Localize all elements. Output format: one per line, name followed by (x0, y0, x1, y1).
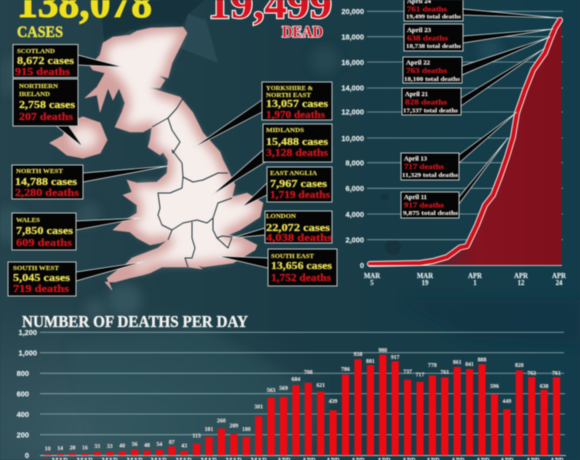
bar value labels: 786 (341, 367, 350, 373)
callout: Yorkshire and North East: 1,970 deaths (266, 109, 326, 121)
callout: South East: 13,656 cases (271, 260, 333, 272)
callout: South West: 719 deaths (13, 283, 70, 295)
callout: Midlands (212, 124, 332, 195)
gridlines and y axis labels: 400 (17, 410, 29, 419)
callout: Northern Ireland: NORTHERN (19, 83, 58, 90)
x axis (364, 266, 566, 287)
area under curve (420, 20, 562, 265)
bar value labels: 10 (45, 446, 51, 452)
callout: Yorkshire and North East: YORKSHIRE & (266, 85, 313, 92)
callout: Scotland: SCOTLAND (17, 48, 55, 55)
bar value labels: 917 (391, 355, 400, 361)
bar value labels: 449 (503, 399, 511, 405)
y axis gridlines and labels: 2,000 (346, 236, 364, 244)
y axis gridlines and labels: 20,000 (341, 7, 364, 16)
callout: London: 4,038 deaths (266, 232, 333, 244)
bar value labels: 180 (242, 427, 251, 433)
y axis gridlines and labels: 8,000 (346, 158, 364, 168)
y axis gridlines and labels: 6,000 (346, 184, 364, 193)
y axis gridlines and labels: 10,000 (341, 134, 364, 143)
bar value labels: 113 (192, 434, 201, 440)
callout: Northern Ireland: IRELAND (19, 91, 50, 98)
x axis: MAR (364, 273, 380, 280)
headline: total deaths (208, 0, 332, 41)
bar value labels: 841 (465, 362, 474, 368)
gridlines and y axis labels: 600 (17, 390, 29, 398)
callout: Midlands: 3,128 deaths (266, 147, 329, 159)
bar value labels: 43 (181, 444, 187, 450)
bar value labels: 54 (157, 442, 162, 448)
bar value labels: 33 (94, 444, 100, 450)
Great Britain highlight (100, 27, 263, 278)
callout: April 21 (402, 48, 545, 115)
x axis: MAR (417, 273, 433, 280)
callout: April 13: 11,329 total deaths (402, 173, 459, 179)
region borders (152, 98, 232, 267)
bar value labels: 763 (527, 371, 536, 377)
callout: Midlands: MIDLANDS (266, 127, 304, 134)
bar value labels: 87 (169, 440, 175, 446)
bar value labels: 708 (304, 370, 313, 376)
bar value labels: 638 (540, 384, 549, 390)
bar value labels: 381 (254, 404, 263, 410)
gridlines and y axis labels: 1,000 (18, 348, 37, 358)
bar value labels: 209 (230, 424, 238, 430)
callout: Wales: 7,850 cases (16, 225, 74, 237)
callout: Midlands: 15,488 cases (266, 136, 329, 148)
callout: East Anglia: 7,967 cases (270, 178, 328, 190)
bar value labels: 56 (132, 442, 138, 448)
x axis: 1 (473, 280, 477, 287)
callout: April 23 (404, 24, 553, 51)
callout: Wales (12, 213, 140, 250)
Northern Ireland highlight (70, 126, 98, 150)
bar value labels: 881 (366, 359, 375, 365)
bar value labels: 888 (478, 358, 486, 364)
callout: April 11: April 11 (404, 194, 427, 201)
callout: South East (217, 249, 337, 286)
bar value labels: 260 (217, 418, 226, 424)
y axis gridlines and labels: 0 (360, 261, 364, 270)
callout: East Anglia: 1,719 deaths (270, 189, 331, 201)
Great Britain landmass (85, 27, 263, 290)
callout: April 23: April 23 (407, 27, 431, 34)
bar value labels: 596 (490, 384, 499, 390)
callout: April 13: April 13 (404, 156, 427, 162)
callout: Yorkshire and North East: 13,057 cases (266, 98, 329, 110)
callout: South West: 5,045 cases (13, 272, 71, 284)
callout: Northern Ireland (13, 79, 83, 147)
bar value labels: 14 (57, 446, 63, 452)
bar value labels: 439 (329, 399, 338, 405)
bar value labels: 16 (82, 446, 88, 452)
callout: April 24: 19,499 total deaths (406, 14, 462, 20)
callout: April 21: 828 deaths (405, 98, 447, 106)
callout: North West: NORTH WEST (16, 168, 64, 175)
bar value labels: 48 (144, 443, 150, 449)
callout: North West: 2,280 deaths (15, 187, 80, 199)
callout: Northern Ireland: 2,758 cases (19, 99, 76, 111)
headline: total cases (17, 0, 152, 41)
callout: Scotland: 915 deaths (15, 66, 71, 78)
callout: April 21: 17,337 total deaths (403, 108, 459, 114)
callout: April 23: 18,738 total deaths (406, 44, 462, 50)
y axis gridlines and labels: 16,000 (341, 58, 364, 67)
headline: total cases: CASES (17, 24, 63, 41)
y axis gridlines and labels: 18,000 (341, 32, 364, 42)
callout: April 24 (404, 0, 558, 21)
callout: April 13 (401, 112, 517, 180)
map of the UK (50, 27, 263, 290)
bar value labels: 621 (316, 383, 325, 389)
gridlines and y axis labels: 800 (17, 369, 29, 378)
callout: April 21: April 21 (405, 91, 428, 98)
callout: North West (12, 165, 168, 199)
bars (44, 355, 560, 455)
bar value labels: 778 (428, 363, 437, 369)
callout: April 11: 917 deaths (404, 200, 444, 210)
callout: North West: 14,788 cases (15, 176, 78, 188)
callout: April 24: 761 deaths (407, 4, 447, 14)
gridlines and y axis labels (17, 328, 566, 460)
callout: London: LONDON (266, 213, 296, 220)
bar value labels: 861 (453, 360, 462, 366)
bar value labels: 563 (267, 388, 276, 394)
x axis: 19 (422, 280, 429, 287)
x axis: APR (468, 273, 482, 280)
callout: South East: 1,752 deaths (271, 272, 332, 284)
bar value labels: 20 (70, 446, 76, 452)
bar value labels: 737 (403, 370, 412, 376)
callout: Wales: WALES (16, 217, 40, 224)
gridlines and y axis labels: 0 (25, 451, 29, 460)
x axis: APR (514, 273, 528, 280)
gridlines and y axis labels: 200 (17, 430, 29, 440)
callout: April 11 (401, 138, 508, 218)
x axis: APR (552, 273, 566, 280)
bar value labels: 33 (107, 444, 113, 450)
bar value labels: 40 (119, 444, 125, 450)
y axis gridlines and labels: 12,000 (341, 108, 364, 116)
bar chart: deaths per day (17, 328, 566, 460)
bar value labels: 761 (440, 370, 449, 376)
callout: Northern Ireland: 207 deaths (19, 111, 74, 123)
callout: East Anglia (242, 167, 332, 207)
callout: Scotland: 8,672 cases (17, 55, 75, 67)
x axis month labels (52, 458, 564, 460)
callout: Wales: 609 deaths (16, 237, 73, 249)
bar value labels: 980 (378, 348, 387, 354)
bar value labels: 717 (416, 372, 424, 378)
callout: South West: SOUTH WEST (13, 265, 60, 272)
x axis: 5 (370, 280, 374, 287)
callout: April 22: 18,100 total deaths (404, 77, 461, 83)
callout: London (232, 211, 333, 244)
callout: April 13: 717 deaths (404, 162, 444, 171)
heading: number of deaths per day: NUMBER OF DEATHS PER DAY (22, 312, 248, 331)
y axis gridlines and labels: 14,000 (341, 84, 364, 92)
callout: London: 22,072 cases (266, 222, 331, 234)
callout: Scotland (13, 44, 123, 78)
bar value labels: 828 (515, 363, 524, 369)
callout: South East: SOUTH EAST (271, 253, 315, 260)
callout: April 11: 9,875 total deaths (403, 211, 459, 217)
callout: Yorkshire and North East: NORTH EAST (266, 92, 312, 99)
y axis gridlines and labels (341, 7, 563, 270)
line chart: cumulative deaths (341, 0, 566, 287)
bar value labels: 181 (205, 427, 213, 433)
gridlines and y axis labels: 1,200 (18, 328, 37, 337)
x axis: 24 (556, 280, 563, 287)
deaths curve (370, 20, 560, 264)
headline: total deaths: DEAD (282, 24, 323, 41)
callout: April 22 (403, 37, 550, 83)
Northern Ireland landmass (50, 117, 107, 158)
callout: East Anglia: EAST ANGLIA (270, 170, 317, 177)
callout: April 23: 638 deaths (407, 34, 448, 42)
y axis gridlines and labels: 4,000 (346, 210, 364, 219)
callout: April 22: 763 deaths (406, 66, 447, 75)
callout: Yorkshire and North East (193, 82, 332, 148)
x axis: 12 (518, 280, 525, 287)
bar value labels: 761 (552, 371, 561, 377)
bar value labels: 569 (279, 386, 288, 392)
bar value labels: 684 (292, 377, 300, 383)
callout: South West (8, 262, 143, 296)
bar value labels: 938 (354, 352, 362, 358)
callout: April 22: April 22 (406, 60, 430, 66)
bar value labels (45, 348, 561, 452)
